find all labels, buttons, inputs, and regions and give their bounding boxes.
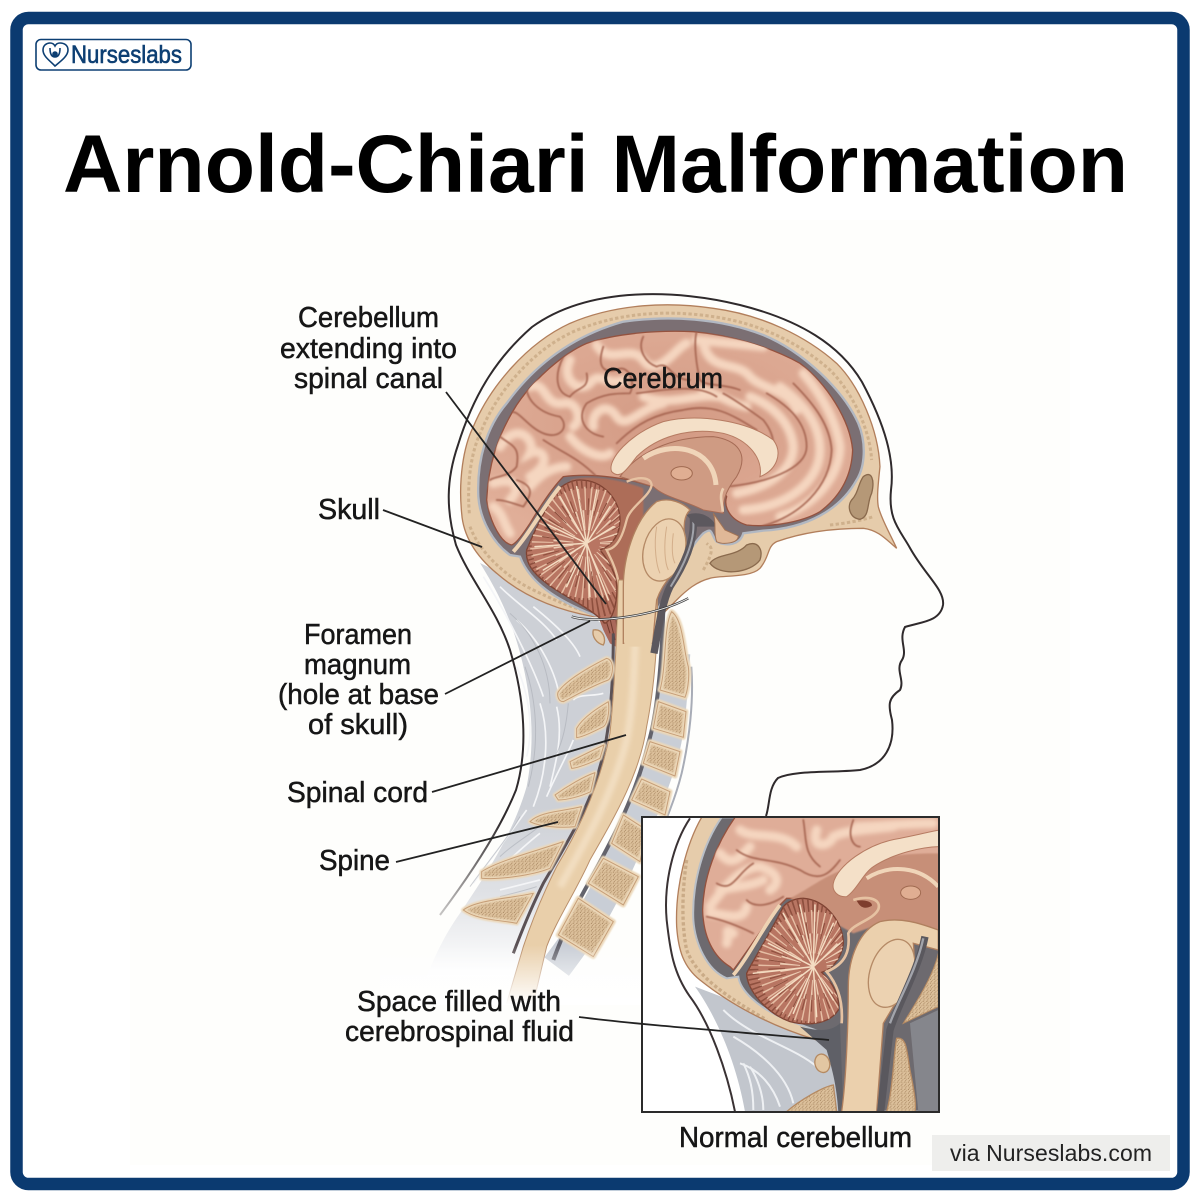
inset dark channel xyxy=(881,937,925,1112)
logo wordmark: Nurseslabs xyxy=(71,41,182,69)
label: CSF space xyxy=(345,986,574,1048)
inset skull xyxy=(676,818,816,1040)
sphenoid sinus xyxy=(710,544,761,572)
gyri xyxy=(490,332,840,533)
illustration: neck soft tissue xyxy=(427,563,622,977)
inset posterior bone xyxy=(787,1085,837,1112)
inset dura cavity xyxy=(693,817,940,1112)
label: CSF space: Space filled with xyxy=(357,986,561,1018)
inset midbrain tube xyxy=(827,898,879,1023)
inset head outline xyxy=(666,818,735,1112)
corpus callosum xyxy=(611,418,778,477)
label: cerebellum extending: spinal canal xyxy=(294,363,443,395)
pons xyxy=(636,514,692,586)
label: cerebellum extending: Cerebellum xyxy=(298,302,439,334)
inset border xyxy=(642,817,939,1112)
spinous processes xyxy=(463,630,612,923)
intervertebral discs xyxy=(557,653,675,967)
source badge: via Nurseslabs.com xyxy=(950,1140,1152,1166)
inset panel: normal cerebellum xyxy=(642,817,940,1112)
label: cerebellum extending: extending into xyxy=(280,333,457,365)
inset atlas arch xyxy=(814,1053,830,1074)
spinal cord xyxy=(507,580,658,1003)
inset tentorium xyxy=(733,905,780,975)
inset cerebellum xyxy=(746,898,844,1024)
inset fornix xyxy=(867,869,938,887)
inset neck tissue xyxy=(695,987,840,1112)
inset pons xyxy=(868,938,916,1008)
tonsil tail below foramen xyxy=(587,587,622,650)
inset cerebrum xyxy=(703,817,940,970)
label: foramen magnum: Foramen xyxy=(304,619,412,651)
label: foramen magnum: magnum xyxy=(304,649,411,681)
posterior dark canal line xyxy=(513,633,613,953)
title: Arnold-Chiari Malformation xyxy=(63,119,1128,210)
label: spine: Spine xyxy=(319,845,390,877)
inset brainstem xyxy=(842,920,938,1112)
inset vertebra xyxy=(887,1038,915,1112)
label: spinal cord: Spinal cord xyxy=(287,777,428,809)
cerebellum xyxy=(526,479,621,624)
midbrain tube xyxy=(607,478,652,613)
tentorium xyxy=(513,487,560,552)
dark CSF channel xyxy=(654,518,693,653)
frontal sinus xyxy=(849,475,873,519)
anterior ligament xyxy=(643,667,692,873)
label: foramen magnum: (hole at base xyxy=(278,679,439,711)
thalamus oval xyxy=(671,467,692,480)
region behind cerebellum xyxy=(570,478,643,617)
skull bone xyxy=(461,305,897,617)
label: cerebrum: Cerebrum xyxy=(603,363,723,395)
inset CSF space xyxy=(800,1023,843,1112)
inset pharynx grey xyxy=(910,1010,938,1112)
leader line: CSF space xyxy=(579,1017,829,1040)
anterior dark canal line xyxy=(553,610,663,960)
inset corpus callosum xyxy=(833,830,940,897)
head outline xyxy=(440,294,943,915)
white fade at base of spine xyxy=(380,945,641,1005)
fornix xyxy=(643,449,716,485)
foramen magnum ring xyxy=(572,598,688,619)
intracranial dura xyxy=(478,318,864,620)
label: normal cerebellum: Normal cerebellum xyxy=(679,1122,912,1154)
pituitary xyxy=(713,513,738,543)
brainstem xyxy=(623,500,690,643)
leader lines xyxy=(383,392,626,862)
inset thalamus xyxy=(901,886,921,899)
inset diencephalon xyxy=(790,853,940,933)
diencephalon xyxy=(620,437,742,513)
label: cerebellum extending xyxy=(280,302,457,395)
illustration: skull and brain xyxy=(461,305,897,623)
skull diploe stipple xyxy=(469,313,873,613)
inset gyri xyxy=(707,820,933,943)
cerebrum xyxy=(487,331,853,545)
illustration: cervical spine xyxy=(463,580,692,1003)
source badge xyxy=(932,1135,1170,1171)
logo: Nurseslabs xyxy=(36,40,191,70)
label: CSF space: cerebrospinal fluid xyxy=(345,1016,574,1048)
label: foramen magnum xyxy=(278,619,439,741)
septum tube xyxy=(721,488,723,512)
inset clivus bone xyxy=(903,953,938,1023)
icon: heart with stethoscope xyxy=(43,43,68,66)
label: skull: Skull xyxy=(318,494,380,526)
label: foramen magnum: of skull) xyxy=(308,709,408,741)
labels xyxy=(278,302,912,1154)
sinuses, pons and brainstem xyxy=(572,475,873,653)
vertebral bodies xyxy=(558,612,689,957)
